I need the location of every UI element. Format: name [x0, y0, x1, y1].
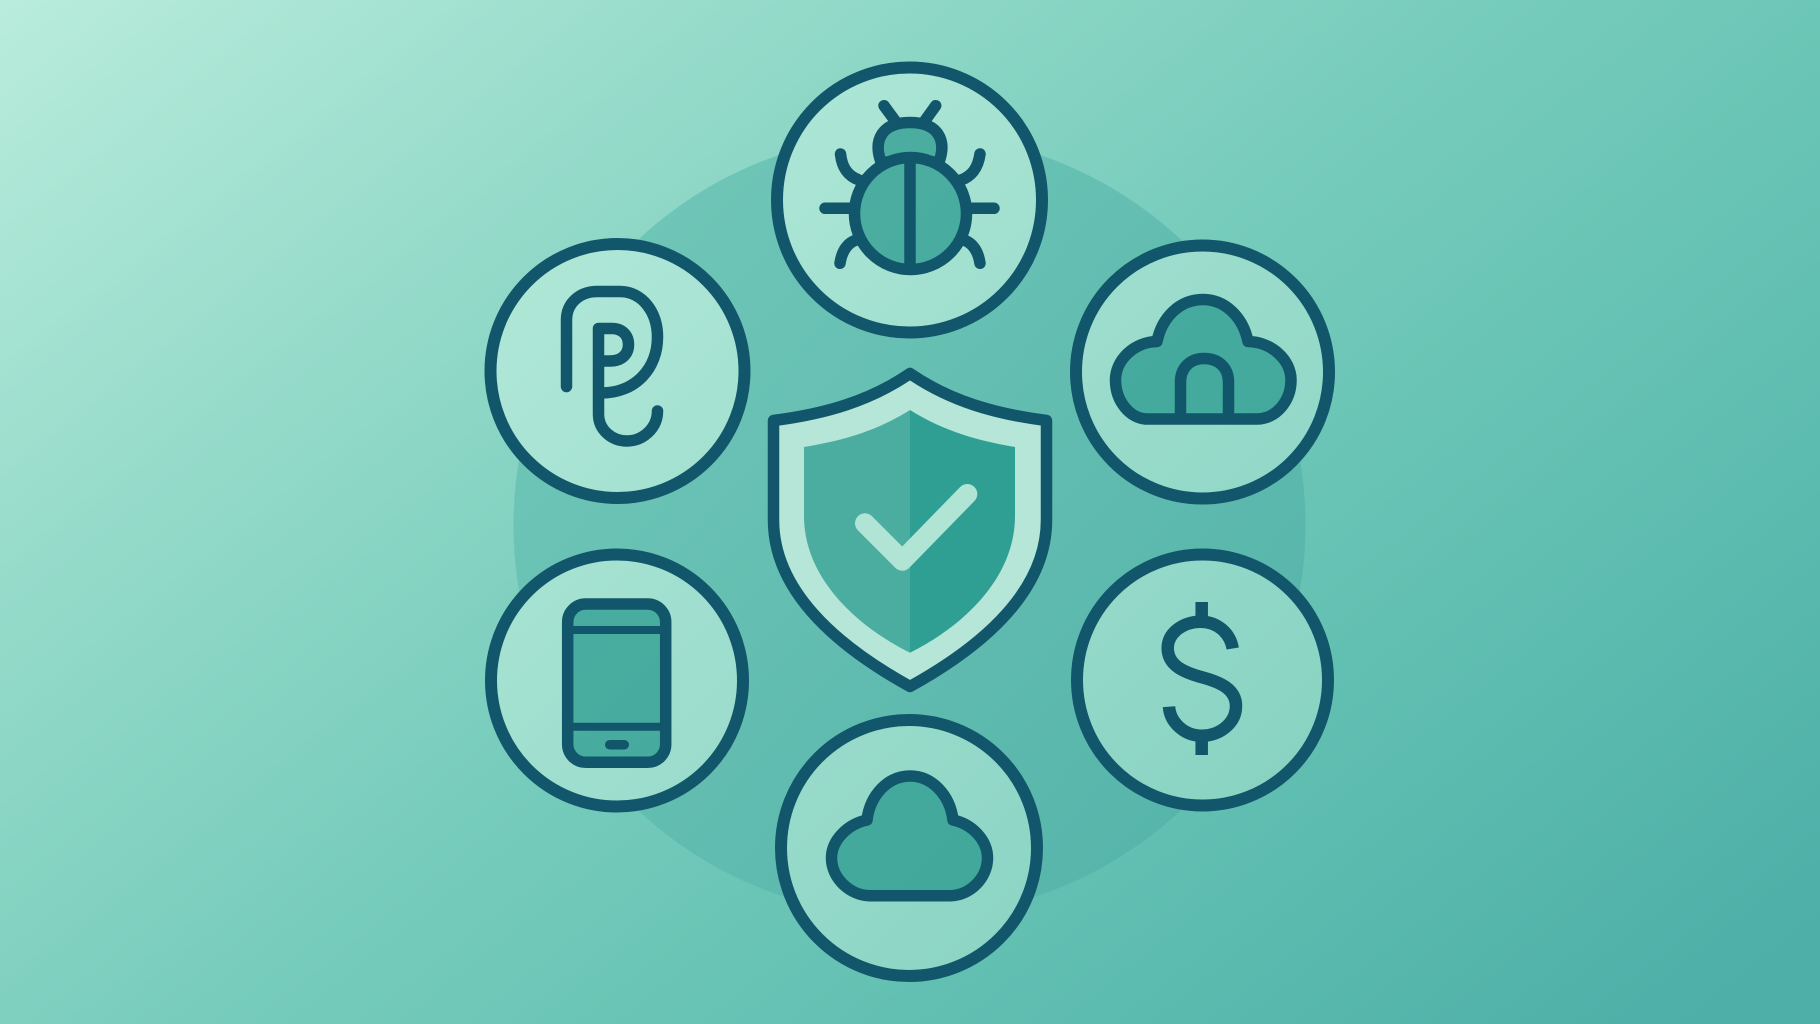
inner P with tail [598, 328, 658, 441]
outer hook of P [566, 292, 658, 393]
icon tile: smartphone [491, 554, 743, 806]
icon tile: dollar sign [1077, 554, 1328, 806]
icon tile: cloud [781, 720, 1037, 976]
bug center line [904, 158, 916, 268]
shield outer frame [774, 374, 1046, 686]
dollar S curve [1168, 622, 1236, 736]
central backdrop disc [514, 133, 1306, 917]
bug legs [825, 154, 994, 263]
bug body [854, 158, 966, 270]
cloud outline [1116, 300, 1291, 419]
shield inner left half [804, 410, 910, 653]
dollar vertical bars [1195, 602, 1208, 755]
phone home button [605, 740, 629, 750]
cloud outline [832, 776, 988, 896]
phone body [568, 604, 666, 762]
icon tile: bug [777, 68, 1042, 332]
bug head [878, 122, 942, 162]
check mark [865, 494, 967, 561]
bug antennae [884, 106, 936, 122]
central shield with check [774, 374, 1046, 686]
shield inner right half [910, 410, 1015, 653]
doorway [1180, 358, 1228, 419]
icon tile: cloud with doorway [1076, 246, 1329, 498]
phone screen dividers [568, 630, 665, 727]
icon tile: letter P outline [490, 244, 744, 498]
